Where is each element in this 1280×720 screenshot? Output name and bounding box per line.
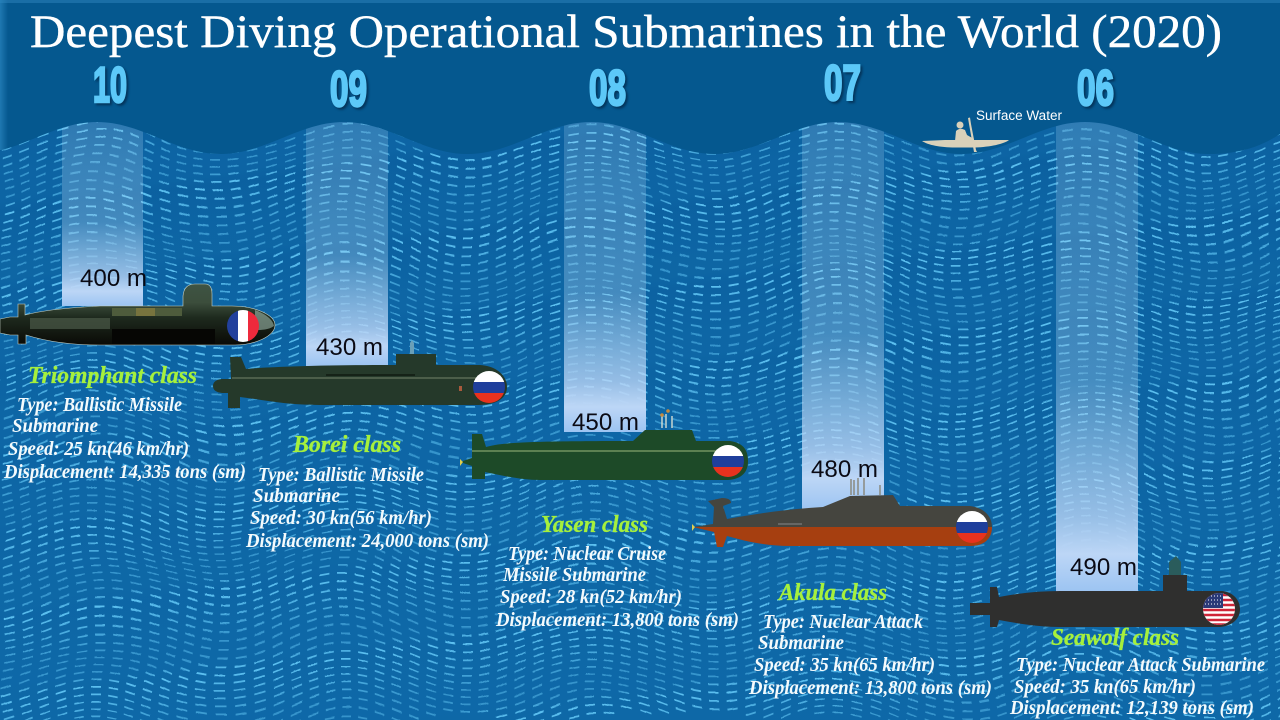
class name: Akula class (777, 580, 887, 606)
title: Deepest Diving Operational Submarines in the World (2020) (30, 6, 1222, 58)
flag: Russia (956, 511, 988, 544)
panel: Akula details (748, 580, 992, 699)
class name: Triomphant class (28, 363, 197, 389)
speed: Speed: 35 kn(65 km/hr) (1014, 677, 1196, 698)
speed: Speed: 35 kn(65 km/hr) (754, 655, 935, 676)
displacement: Displacement: 13,800 tons (sm) (495, 610, 739, 631)
header band with wave edge (0, 0, 1280, 154)
submarine: Seawolf (USA) (970, 556, 1240, 627)
depth label 490 m: 490 m (1070, 554, 1137, 581)
type: Type: Ballistic Missile (258, 465, 424, 486)
rank 10: 10 (93, 57, 127, 113)
panel: Triomphant details (3, 363, 246, 483)
submarine: Borei (Russia) (213, 340, 507, 408)
icon: kayak (922, 118, 1009, 152)
depth beam 490 m (1056, 118, 1138, 592)
submarine: Triomphant (France) (0, 284, 275, 345)
type continued: Submarine (12, 416, 98, 437)
speed: Speed: 28 kn(52 km/hr) (500, 587, 682, 608)
panel: Borei details (245, 432, 489, 552)
panel: Seawolf details (1009, 625, 1265, 719)
type: Type: Nuclear Attack (763, 612, 923, 633)
type: Type: Ballistic Missile (17, 395, 182, 416)
flag: France (227, 310, 259, 342)
displacement: Displacement: 12,139 tons (sm) (1009, 698, 1254, 719)
flag: USA (1203, 593, 1235, 625)
class name: Borei class (292, 432, 401, 458)
depth beam 450 m (564, 120, 646, 432)
speed: Speed: 25 kn(46 km/hr) (8, 439, 189, 460)
type continued: Missile Submarine (502, 565, 646, 586)
depth beam 400 m (62, 120, 143, 306)
flag: Russia (473, 371, 505, 404)
submarine: Yasen (Russia) (460, 409, 748, 480)
rank 09: 09 (330, 61, 367, 117)
depth label 450 m: 450 m (572, 409, 639, 436)
displacement: Displacement: 24,000 tons (sm) (245, 531, 489, 552)
flag: Russia (712, 445, 744, 478)
header top edge (0, 0, 1280, 3)
depth beam 480 m (802, 118, 884, 510)
class name: Yasen class (541, 512, 648, 538)
type continued: Submarine (253, 486, 340, 507)
surface water label: Surface Water (976, 108, 1063, 123)
type: Type: Nuclear Cruise (508, 544, 666, 565)
depth label 400 m: 400 m (80, 265, 147, 292)
header left edge (0, 0, 8, 150)
rank 08: 08 (589, 60, 626, 116)
kayak with surface water label (922, 108, 1063, 152)
depth beam 430 m (306, 120, 388, 366)
rank 07: 07 (824, 55, 861, 111)
displacement: Displacement: 14,335 tons (sm) (3, 462, 246, 483)
type continued: Submarine (758, 633, 844, 654)
submarine: Akula (Russia) (692, 478, 992, 547)
depth label 430 m: 430 m (316, 334, 383, 361)
rank 06: 06 (1077, 60, 1114, 116)
depth label 480 m: 480 m (811, 456, 878, 483)
class name: Seawolf class (1051, 625, 1179, 651)
speed: Speed: 30 kn(56 km/hr) (250, 508, 432, 529)
panel: Yasen details (495, 512, 739, 631)
displacement: Displacement: 13,800 tons (sm) (748, 678, 992, 699)
type: Type: Nuclear Attack Submarine (1016, 655, 1265, 676)
